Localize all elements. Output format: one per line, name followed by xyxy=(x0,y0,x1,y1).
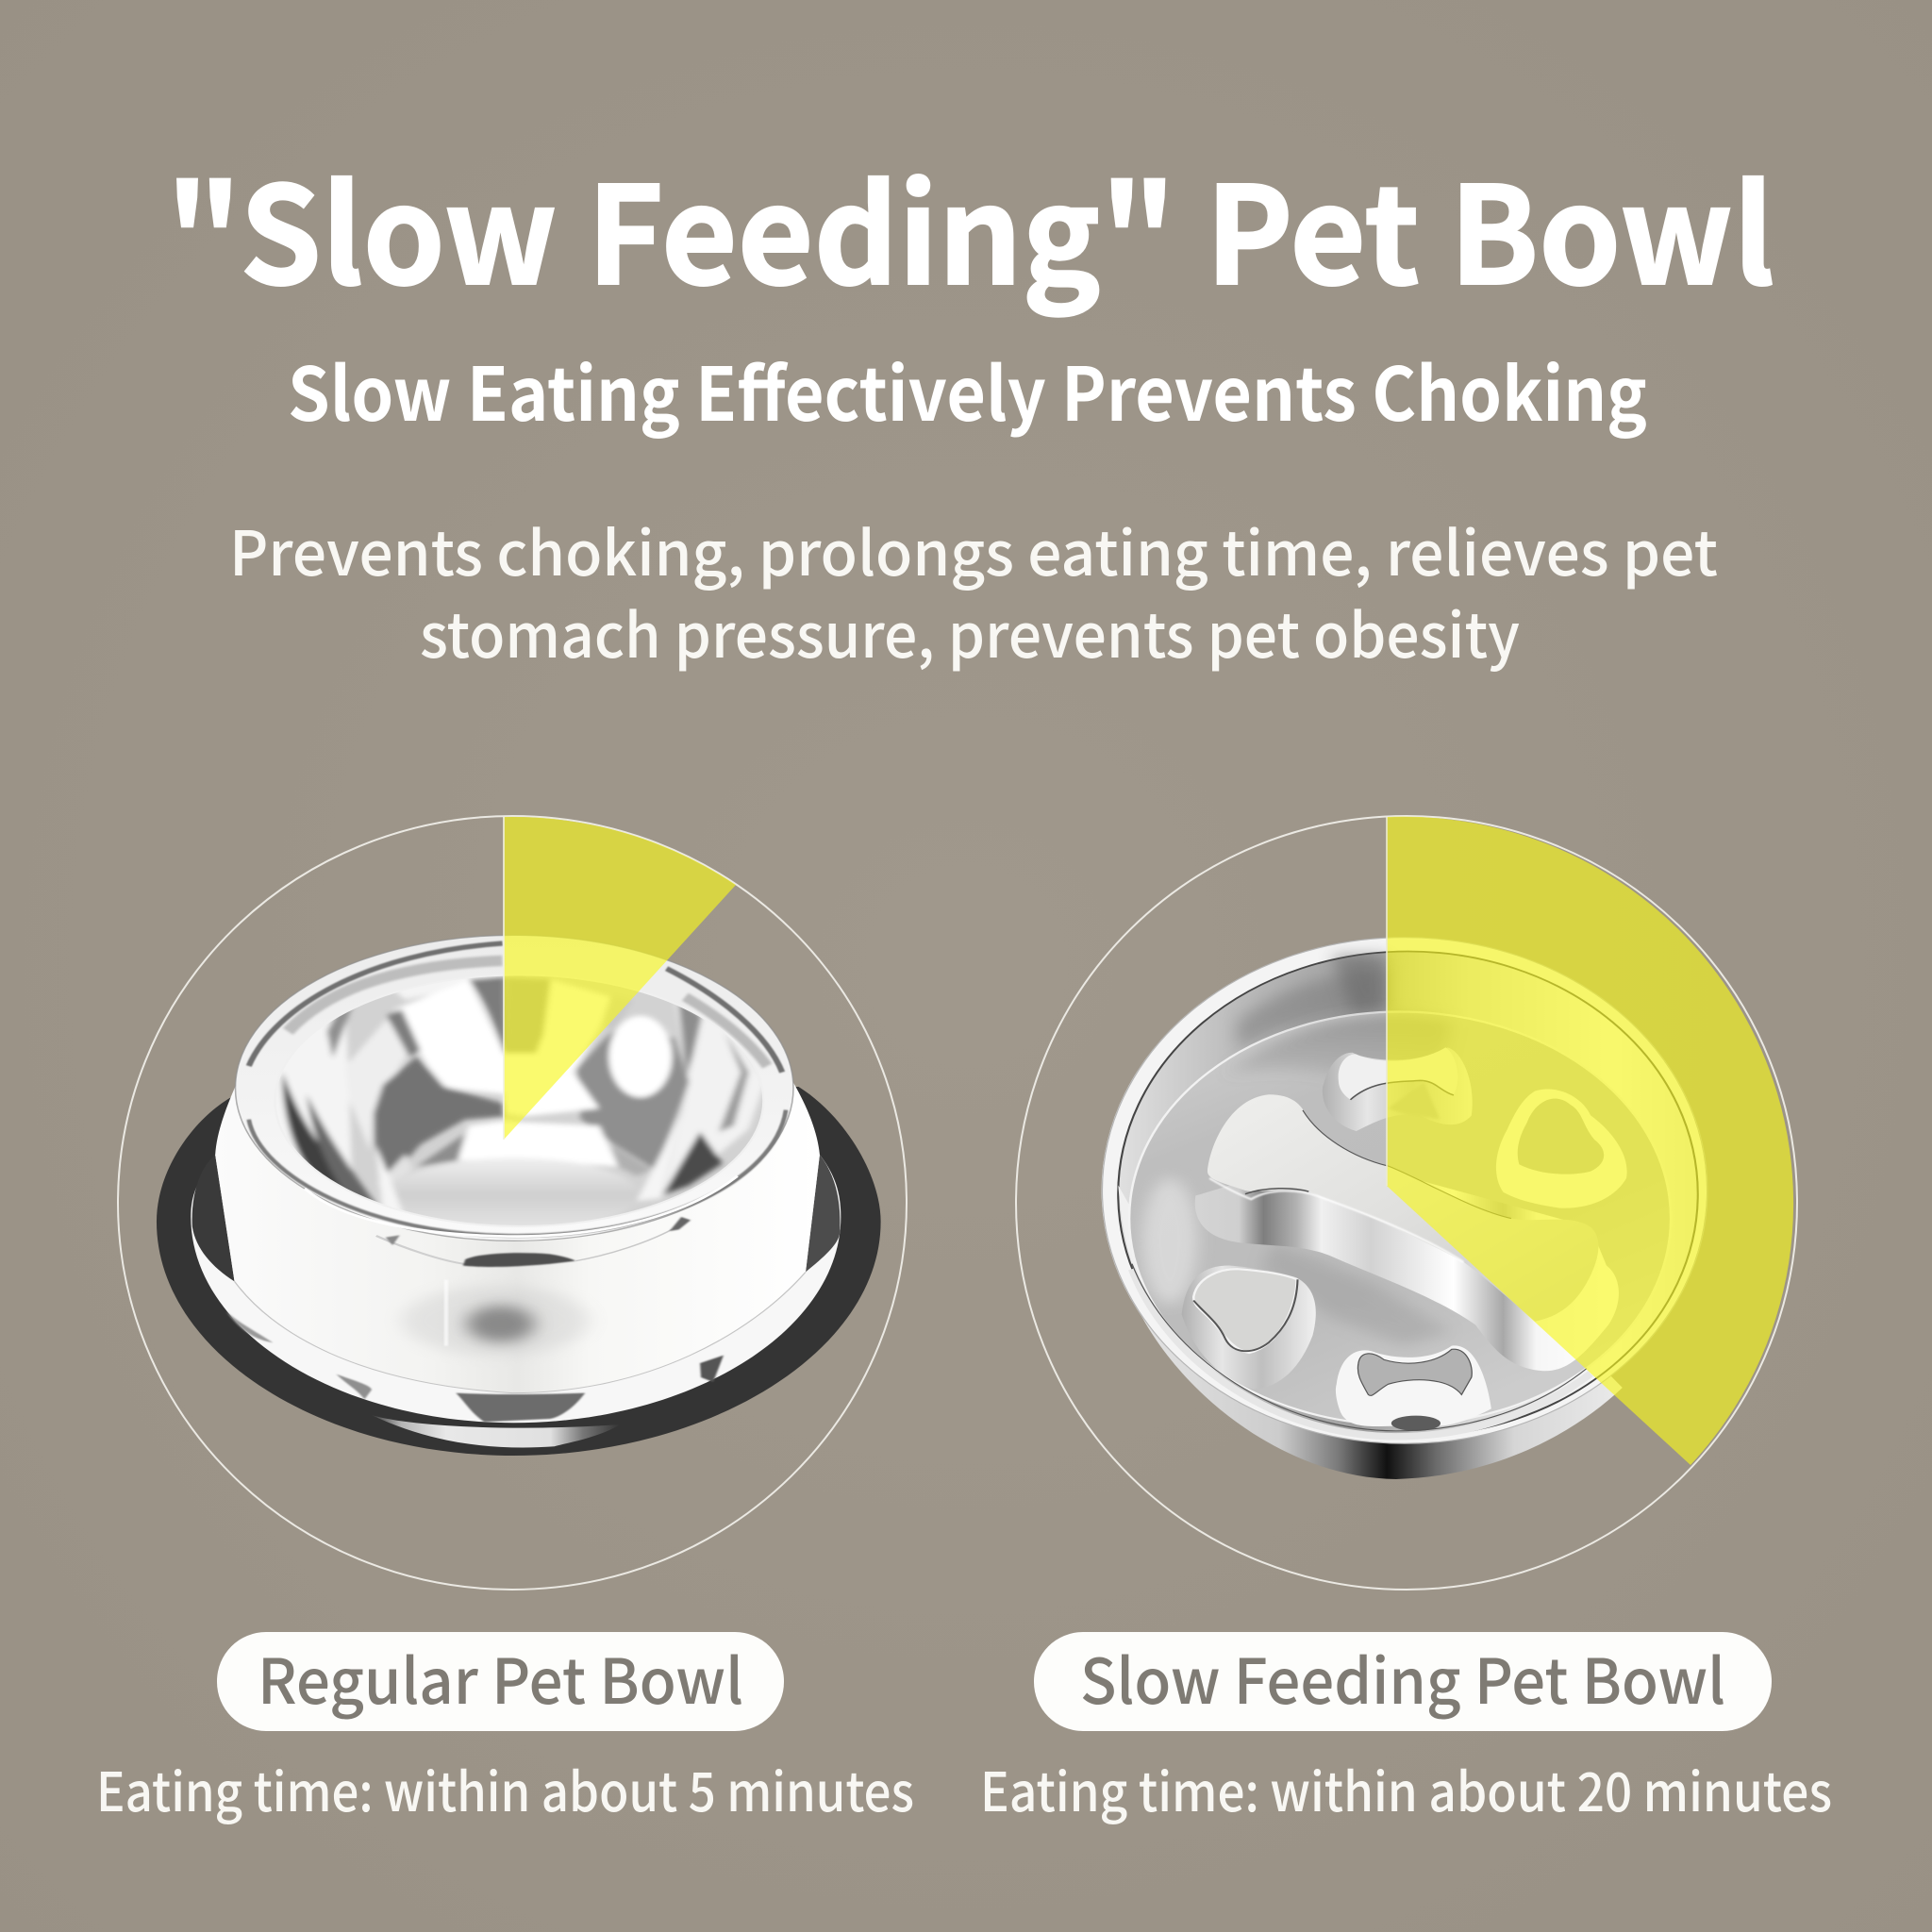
heart top right xyxy=(1496,1090,1627,1208)
eating time: slow feeding: Eating time: within about 20 minutes xyxy=(980,1750,1832,1827)
description text xyxy=(229,505,1718,675)
icon: regular steel bowl xyxy=(157,935,881,1456)
heart bottom left xyxy=(1182,1266,1316,1390)
large bone xyxy=(1195,1094,1619,1371)
eating time: regular: Eating time: within about 5 minutes xyxy=(96,1750,914,1827)
icon: slow feeding steel bowl with bone and heart shapes xyxy=(1102,938,1707,1479)
description text: stomach pressure, prevents pet obesity xyxy=(420,587,1520,675)
yellow time wedge: about 20 minutes xyxy=(1387,817,1793,1465)
yellow time wedge: about 5 minutes xyxy=(504,817,736,1140)
infographic canvas xyxy=(100,174,1830,1824)
description text: Prevents choking, prolongs eating time, relieves pet xyxy=(229,505,1718,593)
label pill: regular pet bowl: Regular Pet Bowl xyxy=(258,1632,743,1723)
small bone bottom xyxy=(1336,1345,1491,1431)
circle outline: regular bowl xyxy=(118,816,907,1590)
circle outline: slow feeding bowl xyxy=(1016,816,1797,1590)
small bone top xyxy=(1323,1047,1473,1131)
panel: slow feeding pet bowl comparison xyxy=(980,816,1832,1827)
panel: regular pet bowl comparison xyxy=(96,816,914,1827)
label pill: slow feeding pet bowl: Slow Feeding Pet Bowl xyxy=(1080,1632,1725,1723)
title: "Slow Feeding" Pet Bowl xyxy=(166,128,1774,324)
subtitle: Slow Eating Effectively Prevents Choking xyxy=(288,337,1647,442)
